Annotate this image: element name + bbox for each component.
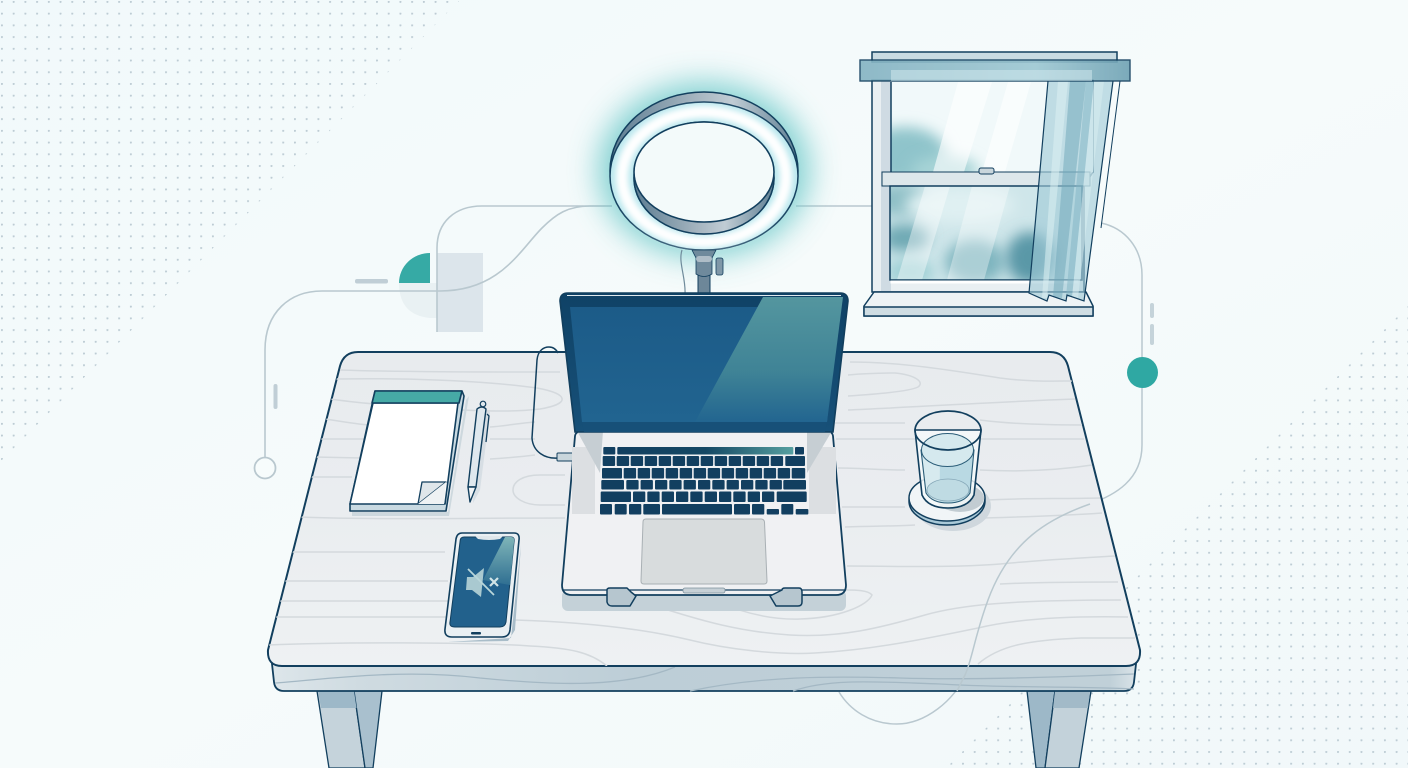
desk leg right [1027,691,1091,768]
laptop shadow [562,590,846,611]
valance pane reflection [891,70,1092,81]
coaster [909,477,985,525]
ring back band [610,92,798,250]
lid top highlight [567,294,841,296]
notepad teal header [372,391,462,403]
dot pattern: top left [0,0,470,470]
notepad page [350,403,458,504]
dashes: vertical right [1150,303,1154,345]
water surface [922,434,974,466]
lower pane [890,186,1081,280]
cable connector [557,453,573,461]
hinge shadow left [577,431,603,473]
desk apron [272,664,1136,691]
ring glow [598,82,810,258]
dash: vertical left [274,384,278,409]
upper pane [892,82,1093,172]
phone [445,533,521,642]
window frame [872,80,1093,292]
connector line: vertical to ring light [437,206,612,332]
laptop lower bezel [582,422,827,432]
decorative shape: pale quarter circle [399,283,437,318]
laptop foot left [607,588,636,606]
connector node: teal circle [1127,357,1158,388]
ring light stand [681,250,723,294]
hinge shadow right [807,431,832,473]
ring inner light [622,112,786,242]
apron grain [275,667,1134,691]
wood grain [268,362,1135,666]
phone port [471,632,481,634]
lower sash bottom [890,280,1078,284]
speaker grille right [809,447,836,514]
glass and coaster [909,411,991,531]
pen [468,401,490,503]
glass rim [915,411,981,450]
desk leg left [317,691,382,768]
water [921,450,974,503]
glass bottom [927,479,969,501]
connector line: ring light to window [796,205,872,207]
laptop lid [560,293,848,432]
speaker grille left [572,447,595,514]
ring inner band [634,122,774,234]
trackpad [641,519,767,584]
decorative shape: teal quarter circle [399,253,430,283]
desk [268,352,1140,768]
notepad pad body [350,391,464,511]
desk top [268,352,1140,666]
glass body [915,430,981,508]
connector line: window down behind desk [839,223,1142,724]
phone glare [483,537,514,585]
meeting rail [882,172,1090,186]
icon: muted speaker [466,568,498,597]
dot pattern: bottom right [940,300,1408,768]
dash: horizontal [355,279,388,284]
phone notch [475,536,503,540]
notepad page curl [418,482,446,504]
ring front diffuser [610,102,798,250]
sash latch [979,168,994,174]
curtain rod valance [860,60,1130,81]
glass shadow on coaster [936,484,984,512]
phone screen [450,537,514,627]
phone body [445,533,519,637]
wire across desk [957,504,1090,691]
phone shadow [448,545,521,642]
ring hole [634,122,774,222]
laptop cable [532,347,558,458]
laptop base [562,431,846,595]
notepad shadow [352,396,469,516]
decorative shape: grey rectangle [437,253,483,332]
curtain cord [1101,81,1120,228]
notepad [350,391,469,516]
keyboard [600,447,808,514]
laptop foot right [770,588,802,606]
front notch [683,588,725,593]
laptop [532,293,848,611]
coaster shadow [915,481,991,531]
window top casing [872,52,1117,62]
window sill [864,292,1093,316]
window [860,52,1130,316]
laptop screen [570,307,838,422]
window jamb shade [881,81,891,291]
ring light [598,82,810,258]
connector node: open circle [254,458,276,478]
connector line: left circle to ring light [265,206,612,458]
laptop screen glare [695,297,843,422]
curtain [1029,81,1113,301]
